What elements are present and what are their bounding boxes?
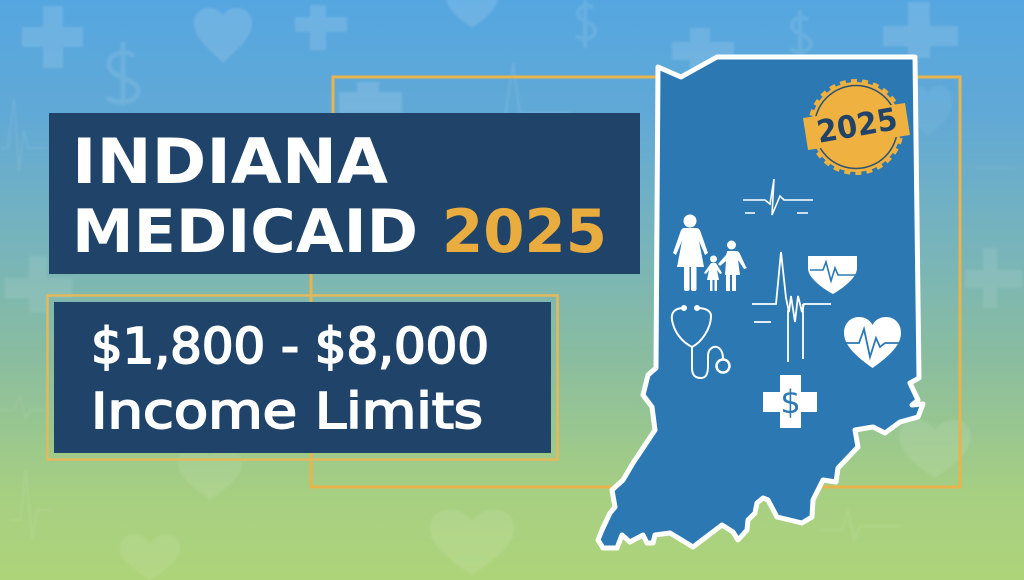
icon: small pulse line: [743, 179, 813, 215]
heading: 2025: 2025: [442, 197, 607, 267]
gold background frame: [311, 77, 960, 487]
map: Indiana state: [598, 57, 923, 548]
text: dollar sign: $: [780, 383, 801, 421]
icon: family: [673, 214, 747, 291]
text: seal year: 2025: [814, 101, 900, 151]
icon: stethoscope: [672, 306, 730, 378]
panel: income limits: [48, 296, 558, 460]
panel: title: [49, 113, 640, 274]
heading: Indiana: INDIANA: [72, 125, 388, 198]
icon: large pulse line: [752, 252, 831, 362]
icon: medical cross with dollar: [763, 375, 817, 428]
text: income limits: Income Limits: [91, 383, 483, 440]
text: dollar range: $1,800 - $8,000: [91, 318, 489, 375]
heading: Medicaid: MEDICAID: [72, 197, 418, 267]
icon: heart shield: [808, 256, 857, 294]
icon: heart with pulse: [844, 317, 901, 368]
badge: 2025 seal: [803, 81, 910, 173]
